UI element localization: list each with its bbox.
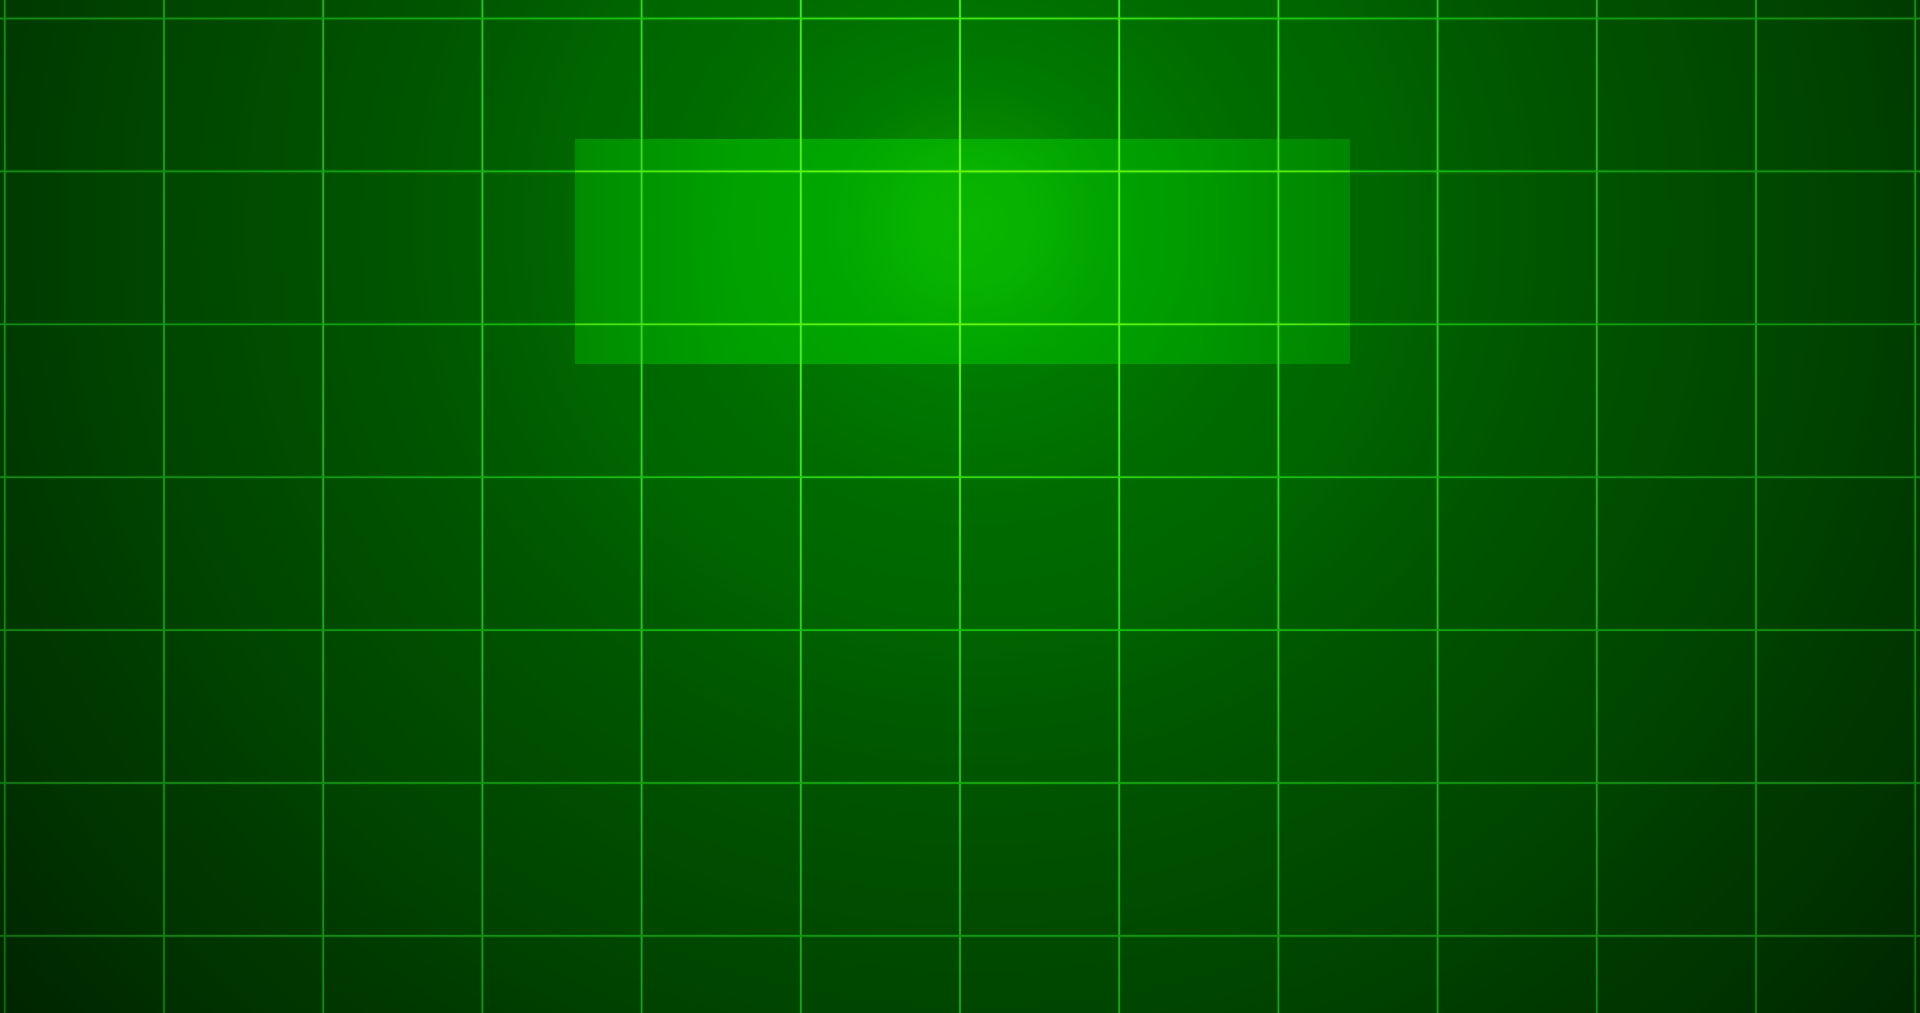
translucent central panel (575, 139, 1350, 364)
